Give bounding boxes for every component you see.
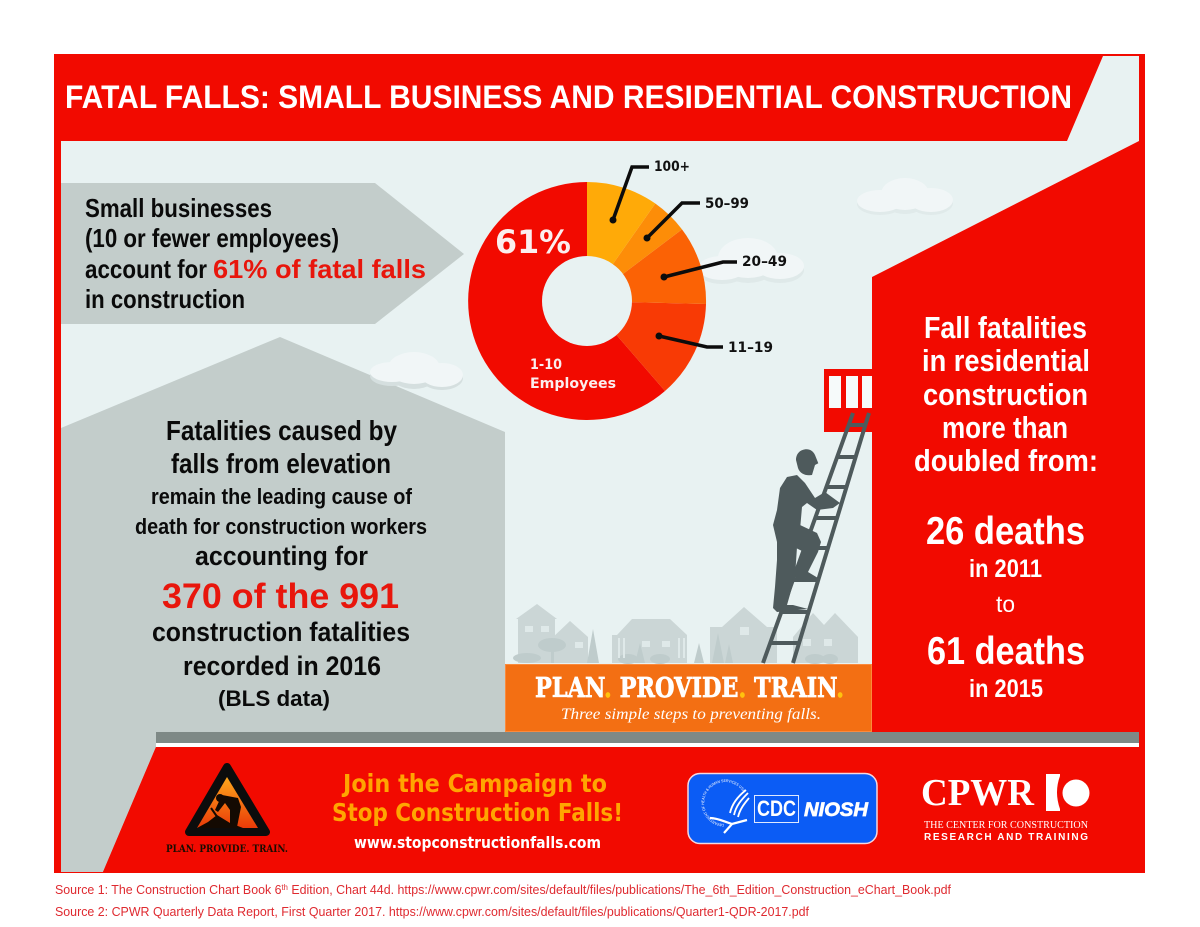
campaign logo: warning triangle [166,767,288,855]
house text [135,415,427,711]
CPWR name: THE CENTER FOR CONSTRUCTION [924,820,1088,831]
neighborhood silhouette [513,604,858,664]
rear leg [773,525,808,612]
residential fatalities text: construction [923,377,1088,412]
arrow text: in construction [85,284,245,314]
house text: death for construction workers [135,514,427,539]
campaign call to action: Stop Construction Falls! [332,798,623,827]
leader labels [654,159,787,356]
house text: accounting for [195,541,368,571]
right red panel [872,138,1145,732]
white rule [156,743,1139,747]
residential fatalities text: 61 deaths [927,630,1085,673]
residential fatalities text: Fall fatalities [924,310,1087,345]
residential fatalities text: doubled from: [914,443,1098,478]
leader labels: 100+ [654,159,690,175]
CDC logo: CDC [757,796,796,821]
HHS eagle: DEPARTMENT OF HEALTH & HUMAN SERVICES USA [701,779,745,827]
arrow text [85,193,426,314]
leader lines [613,167,737,347]
slice: 11-19 [587,301,706,391]
title: FATAL FALLS: SMALL BUSINESS AND RESIDENTIAL CONSTRUCTION [65,79,1072,115]
house text: (BLS data) [218,686,330,711]
sky panel [61,56,1139,732]
cloud: lower left of pie [370,352,463,390]
cloud: behind pie [698,238,804,284]
residential fatalities text: in 2011 [969,555,1042,583]
arrow text: (10 or fewer employees) [85,223,339,253]
leader labels: 50–99 [705,196,749,212]
sources: Source 2: CPWR Quarterly Data Report, First Quarter 2017. https://www.cpwr.com/sites/default/files/publications/Quarter1-QDR-2017.pdf [55,904,809,919]
campaign call to action: www.stopconstructionfalls.com [354,833,601,852]
cloud: upper right [857,178,953,215]
agency logos: HHS, CDC, NIOSH [687,772,878,844]
logo caption: PLAN. PROVIDE. TRAIN. [166,843,288,855]
pie slice label: Employees [530,376,616,392]
CPWR circle mark [1062,780,1090,806]
residential fatalities text: in 2015 [969,675,1043,703]
campaign call to action [332,769,623,852]
sources: Source 1: The Construction Chart Book 6 [55,882,292,897]
arrow panel: small businesses [61,183,464,324]
arrow text: 61% of fatal falls [213,254,426,284]
sources: Edition, Chart 44d. https://www.cpwr.com/sites/default/files/publications/The_6th_Edition_Construction_eChart_Book.pdf [288,882,951,897]
residential fatalities text: to [996,591,1015,617]
house text: remain the leading cause of [151,484,413,509]
house text: recorded in 2016 [183,651,381,681]
slice: 100+ [587,182,655,301]
slice: 50-99 [587,204,682,301]
CPWR bracket mark [1046,774,1060,811]
pie slice label: 1-10 [530,357,562,373]
slice: 20-49 [587,229,706,304]
banner tagline: Three simple steps to preventing falls. [561,706,821,723]
CPWR logo: CPWR [921,772,1035,814]
house text: falls from elevation [171,448,391,479]
banner heading: PLAN. PROVIDE. TRAIN. [535,673,844,704]
torso and arm [773,475,840,532]
arrow text: account for [85,254,207,284]
residential fatalities text: more than [942,410,1068,445]
house text: 370 of the 991 [162,577,399,616]
leader dots [610,216,668,340]
pie slice label [530,357,616,392]
leader labels: 11–19 [728,340,773,356]
campaign call to action: Join the Campaign to [341,769,607,798]
ladder [763,413,869,663]
raised leg [785,525,821,582]
house text: construction fatalities [152,617,410,647]
pie value label: 61% [495,223,571,261]
leader labels: 20–49 [742,254,787,270]
slice: 1-10 employees [468,182,665,420]
NIOSH logo: NIOSH [804,800,869,821]
worker silhouette [773,449,840,612]
house text: Fatalities caused by [166,415,397,446]
sources [55,882,951,919]
footer red band [54,747,1145,873]
hard hat and head [796,449,818,475]
window [824,369,872,432]
donut hole [542,256,632,346]
CPWR logo [921,772,1090,843]
plan provide train banner [506,664,872,732]
pie chart: fatal falls by employer size [468,159,787,420]
arrow text: Small businesses [85,193,272,223]
residential fatalities text [914,310,1098,703]
house panel: falls from elevation [61,337,505,872]
ground bar [156,732,1139,743]
residential fatalities text: 26 deaths [926,510,1085,553]
sources: th [282,883,288,892]
CPWR logo: RESEARCH AND TRAINING [924,832,1088,843]
residential fatalities text: in residential [922,343,1090,378]
